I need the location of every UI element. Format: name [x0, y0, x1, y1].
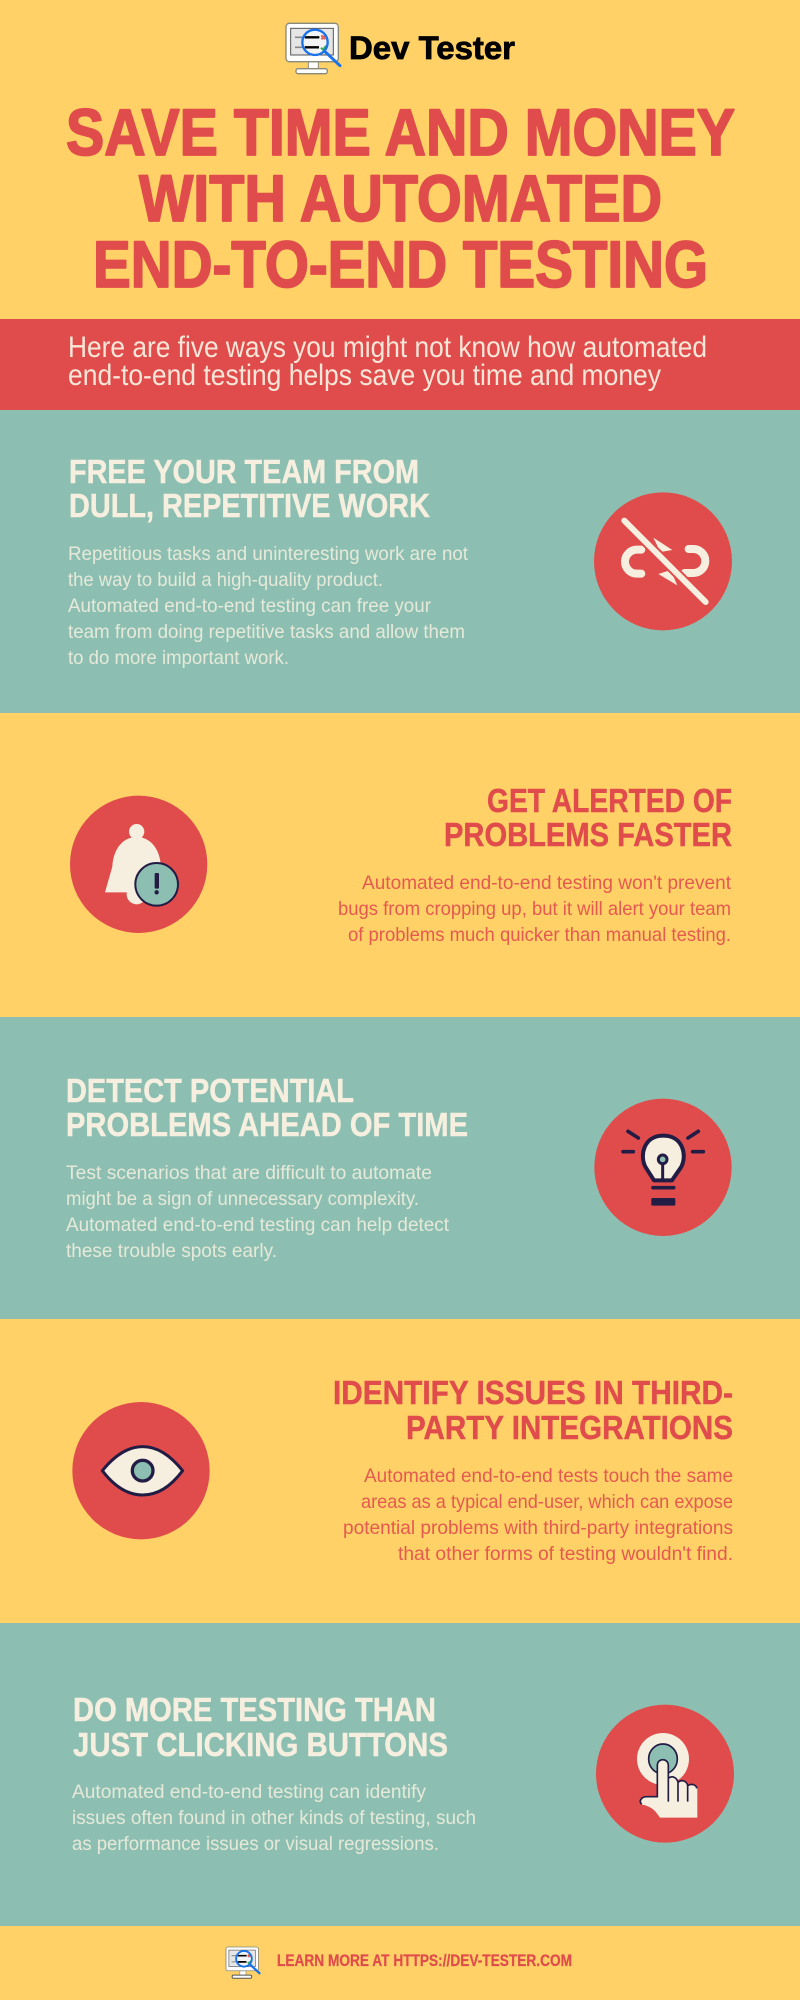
title: WITH AUTOMATED — [139, 161, 662, 235]
heading — [333, 1374, 733, 1446]
heading — [73, 1691, 448, 1763]
body text: areas as a typical end-user, which can expose — [361, 1491, 733, 1513]
logo wordmark: Dev Tester — [349, 30, 515, 66]
heading — [66, 1072, 468, 1143]
body text — [72, 1781, 476, 1855]
body text: Test scenarios that are difficult to automate — [66, 1162, 432, 1184]
body text: Automated end-to-end tests touch the same — [364, 1465, 733, 1487]
body text: to do more important work. — [68, 647, 289, 669]
title — [66, 95, 735, 301]
body text: Repetitious tasks and uninteresting work are not — [68, 543, 469, 565]
body text: that other forms of testing wouldn't find. — [398, 1543, 733, 1565]
body text: issues often found in other kinds of testing, such — [72, 1807, 476, 1829]
body text: Automated end-to-end testing can free your — [68, 595, 431, 617]
heading: DO MORE TESTING THAN — [73, 1691, 436, 1728]
body text: Automated end-to-end testing can identify — [72, 1781, 426, 1803]
body text: as performance issues or visual regressions. — [72, 1833, 439, 1855]
intro text: Here are five ways you might not know how automated — [68, 331, 707, 364]
body text: Automated end-to-end testing can help detect — [66, 1214, 450, 1236]
panel: identify issues — [0, 1319, 800, 1623]
heading: DETECT POTENTIAL — [66, 1072, 354, 1109]
body text: team from doing repetitive tasks and allow them — [68, 621, 465, 643]
logo: Dev Tester — [286, 23, 515, 74]
panel: detect potential problems — [0, 1017, 800, 1319]
heading — [444, 782, 732, 853]
heading: PROBLEMS AHEAD OF TIME — [66, 1106, 468, 1143]
background: top header band — [0, 0, 800, 319]
body text: potential problems with third-party integrations — [343, 1517, 733, 1539]
icon: footer logo — [226, 1947, 259, 1978]
icon: broken link — [594, 492, 732, 630]
icon: light bulb — [594, 1099, 732, 1236]
panel: free your team — [0, 410, 800, 713]
footer link text: LEARN MORE AT HTTPS://DEV-TESTER.COM — [277, 1952, 572, 1970]
body text: these trouble spots early. — [66, 1240, 277, 1262]
heading: FREE YOUR TEAM FROM — [69, 453, 419, 490]
body text — [68, 543, 469, 669]
heading: PROBLEMS FASTER — [444, 816, 732, 853]
heading: JUST CLICKING BUTTONS — [73, 1726, 448, 1763]
panel: do more testing — [0, 1623, 800, 1926]
heading: IDENTIFY ISSUES IN THIRD- — [333, 1374, 733, 1411]
heading: GET ALERTED OF — [487, 782, 732, 819]
icon: finger pressing button — [596, 1705, 734, 1843]
body text: Automated end-to-end testing won't prevent — [362, 872, 732, 894]
body text: bugs from cropping up, but it will alert your team — [338, 898, 731, 920]
title: END-TO-END TESTING — [93, 227, 708, 301]
body text — [343, 1465, 733, 1565]
panel: get alerted — [0, 713, 800, 1017]
body text — [338, 872, 732, 946]
panel: intro banner — [0, 319, 800, 410]
body text — [66, 1162, 450, 1262]
heading: DULL, REPETITIVE WORK — [69, 487, 430, 524]
icon: monitor with magnifier — [286, 23, 340, 74]
icon: eye — [72, 1402, 210, 1539]
intro text: end-to-end testing helps save you time and money — [68, 359, 661, 392]
intro text — [68, 331, 707, 392]
body text: of problems much quicker than manual testing. — [348, 924, 731, 946]
heading — [69, 453, 430, 524]
body text: the way to build a high-quality product. — [68, 569, 383, 591]
heading: PARTY INTEGRATIONS — [406, 1409, 733, 1446]
icon: bell alert — [70, 796, 207, 933]
body text: might be a sign of unnecessary complexity. — [66, 1188, 419, 1210]
footer — [0, 1926, 800, 2000]
